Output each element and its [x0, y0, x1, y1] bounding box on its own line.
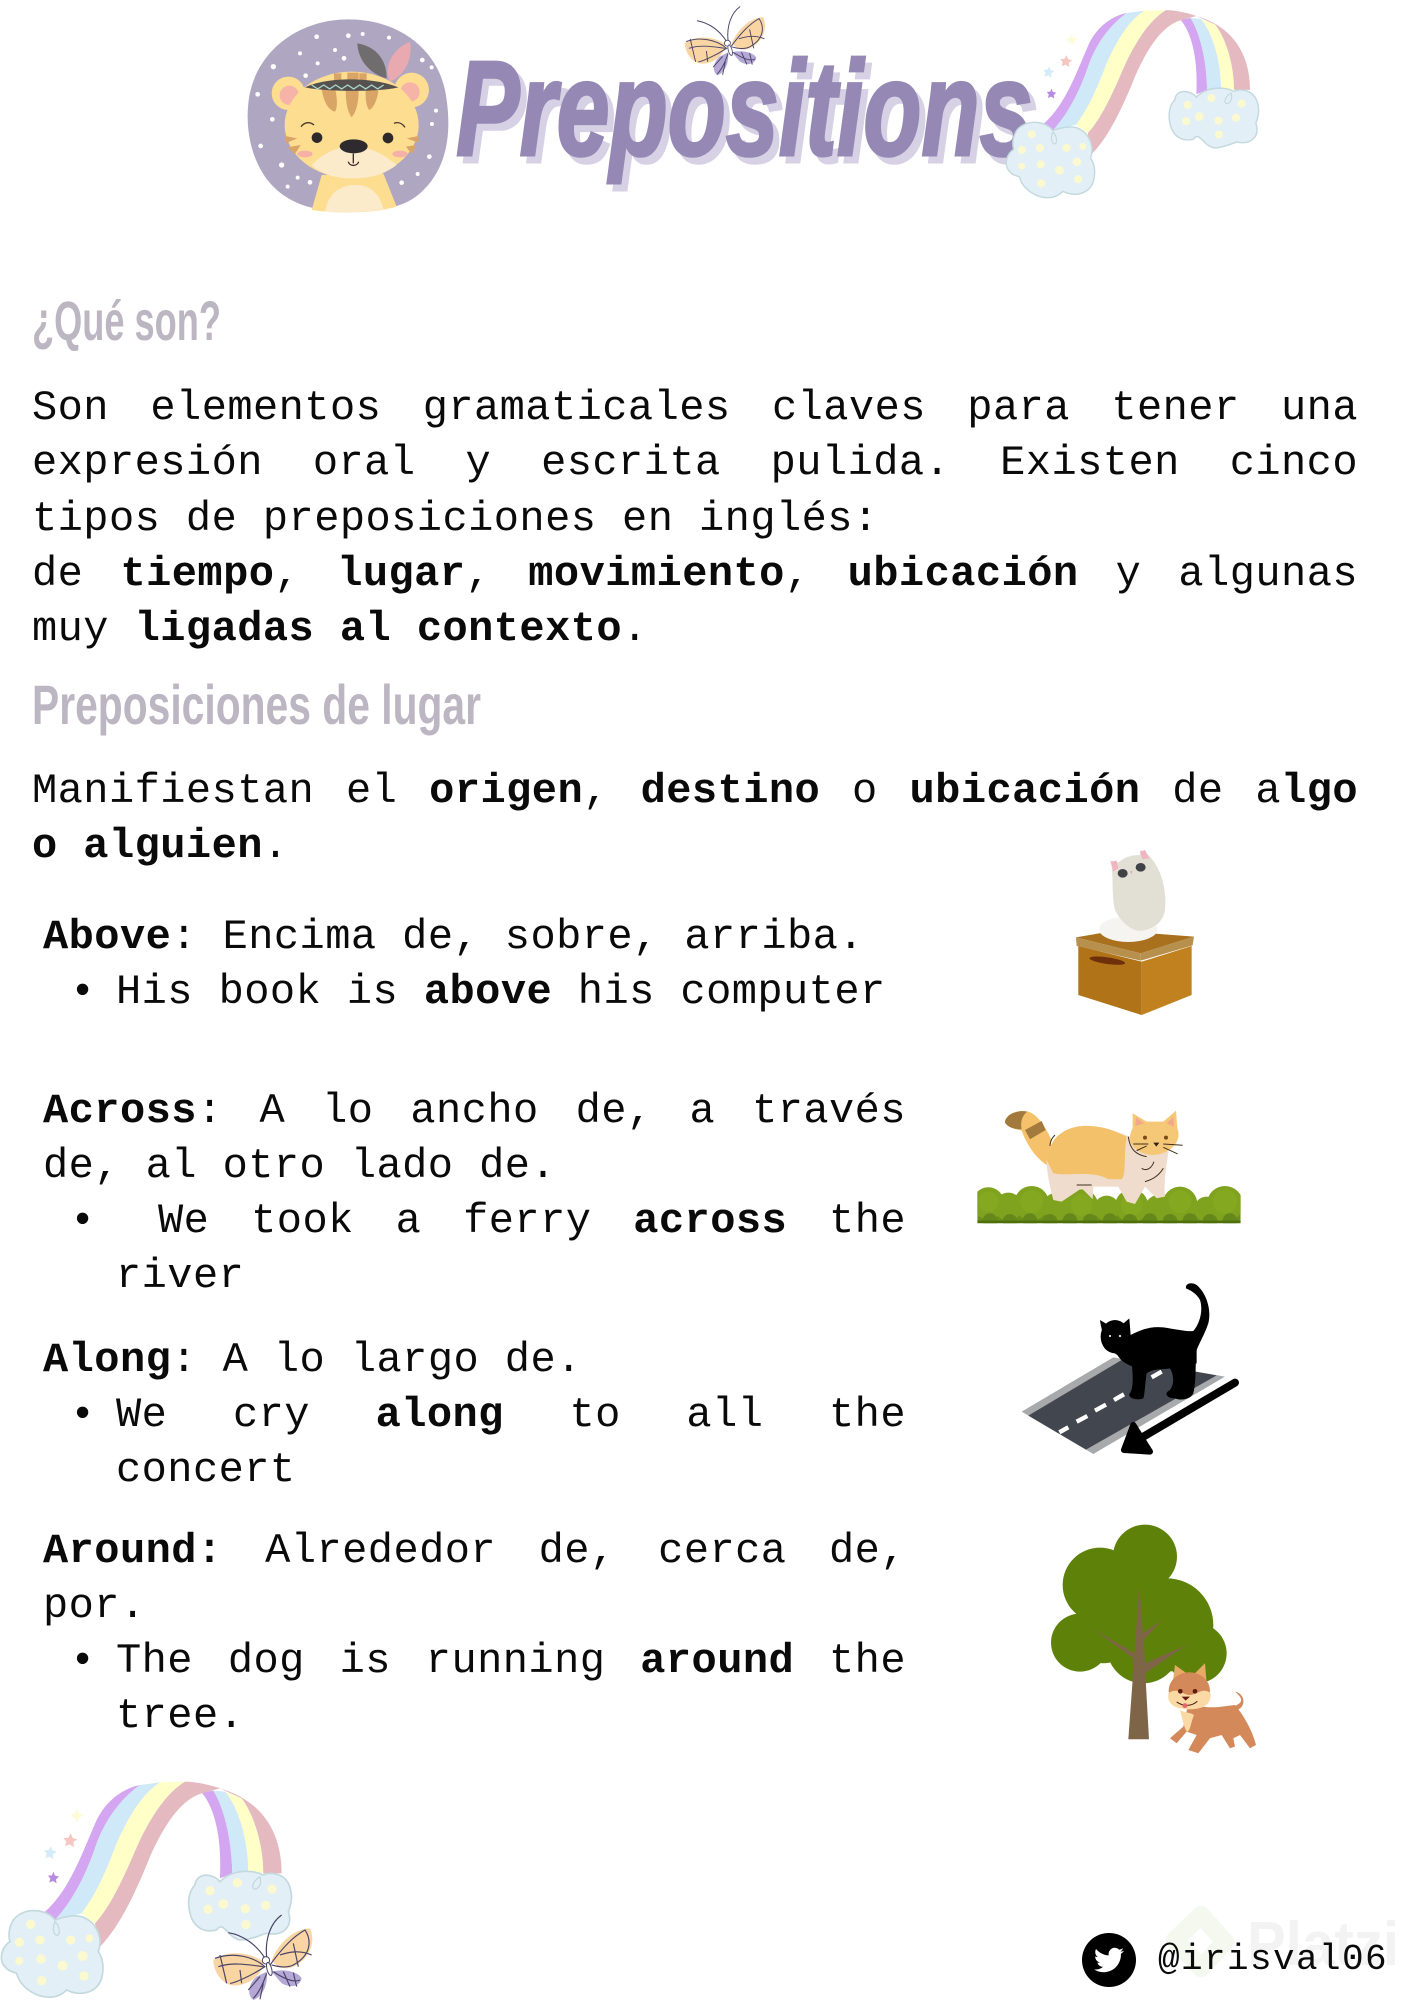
text block: Across: We took a ferry across the — [158, 1197, 906, 1245]
text block: Around: Around: Alrededor de, cerca de, — [43, 1527, 906, 1575]
watermark: Platzi — [1175, 1910, 1399, 1979]
icon: twitter — [1082, 1933, 1136, 1987]
heading: Qué son: ¿Qué son? — [32, 289, 221, 352]
heading: Preposiciones de lugar: Preposiciones de lugar — [32, 673, 481, 736]
text block: Above — [43, 913, 886, 1016]
icon: white cat on box — [1076, 850, 1194, 1015]
text block: place prepositions intro — [32, 767, 1358, 870]
text block: Along: We cry along to all the — [116, 1391, 906, 1439]
text block: Above: Above: Encima de, sobre, arriba. — [43, 913, 864, 961]
text block: definition paragraph: de tiempo, lugar, movimiento, ubicación y algunas — [32, 550, 1358, 598]
icon: tree with dog — [1051, 1525, 1256, 1753]
text block: definition paragraph: muy ligadas al contexto. — [32, 605, 648, 653]
icon: top butterfly — [685, 6, 765, 75]
title: Prepositions: Prepositions — [456, 32, 1033, 184]
title: Prepositions: Prepositions — [462, 39, 1039, 191]
text block: Around — [43, 1527, 906, 1740]
text block: place prepositions intro: o alguien. — [32, 822, 289, 870]
text block: place prepositions intro: Manifiestan el origen, destino o ubicación de algo — [32, 767, 1358, 815]
text block: Across: river — [116, 1252, 244, 1300]
icon: orange cat on bush — [972, 1111, 1243, 1229]
icon: tiger medallion — [248, 19, 448, 212]
text block: Around: The dog is running around the — [116, 1637, 906, 1685]
text block: Along: • — [70, 1391, 96, 1439]
text block: Along: concert — [116, 1446, 296, 1494]
text block: Around: por. — [43, 1582, 146, 1630]
text block: Across: Across: A lo ancho de, a través — [43, 1087, 906, 1135]
text block: Around: tree. — [116, 1692, 244, 1740]
watermark: Platzi: Platzi — [1247, 1910, 1399, 1979]
text block: Across: • — [70, 1197, 96, 1245]
text block: Across: de, al otro lado de. — [43, 1142, 556, 1190]
text: twitter handle: @irisval06 — [1158, 1939, 1388, 1980]
icon: bottom butterfly — [213, 1915, 312, 2000]
text block: definition paragraph — [32, 384, 1358, 653]
text block: definition paragraph: tipos de preposiciones en inglés: — [32, 495, 879, 543]
icon: top rainbow with clouds — [1006, 10, 1259, 198]
text block: Along — [43, 1336, 906, 1494]
icon: black cat on road with arrow — [1022, 1283, 1235, 1454]
text block: Across — [43, 1087, 906, 1300]
text block: definition paragraph: expresión oral y escrita pulida. Existen cinco — [32, 439, 1358, 487]
text block: Above: • — [70, 968, 96, 1016]
text block: definition paragraph: Son elementos gramaticales claves para tener una — [32, 384, 1358, 432]
text block: Around: • — [70, 1637, 96, 1685]
text block: Above: His book is above his computer — [116, 968, 886, 1016]
icon: bottom rainbow with clouds — [1, 1782, 291, 1997]
text block: Along: Along: A lo largo de. — [43, 1336, 582, 1384]
